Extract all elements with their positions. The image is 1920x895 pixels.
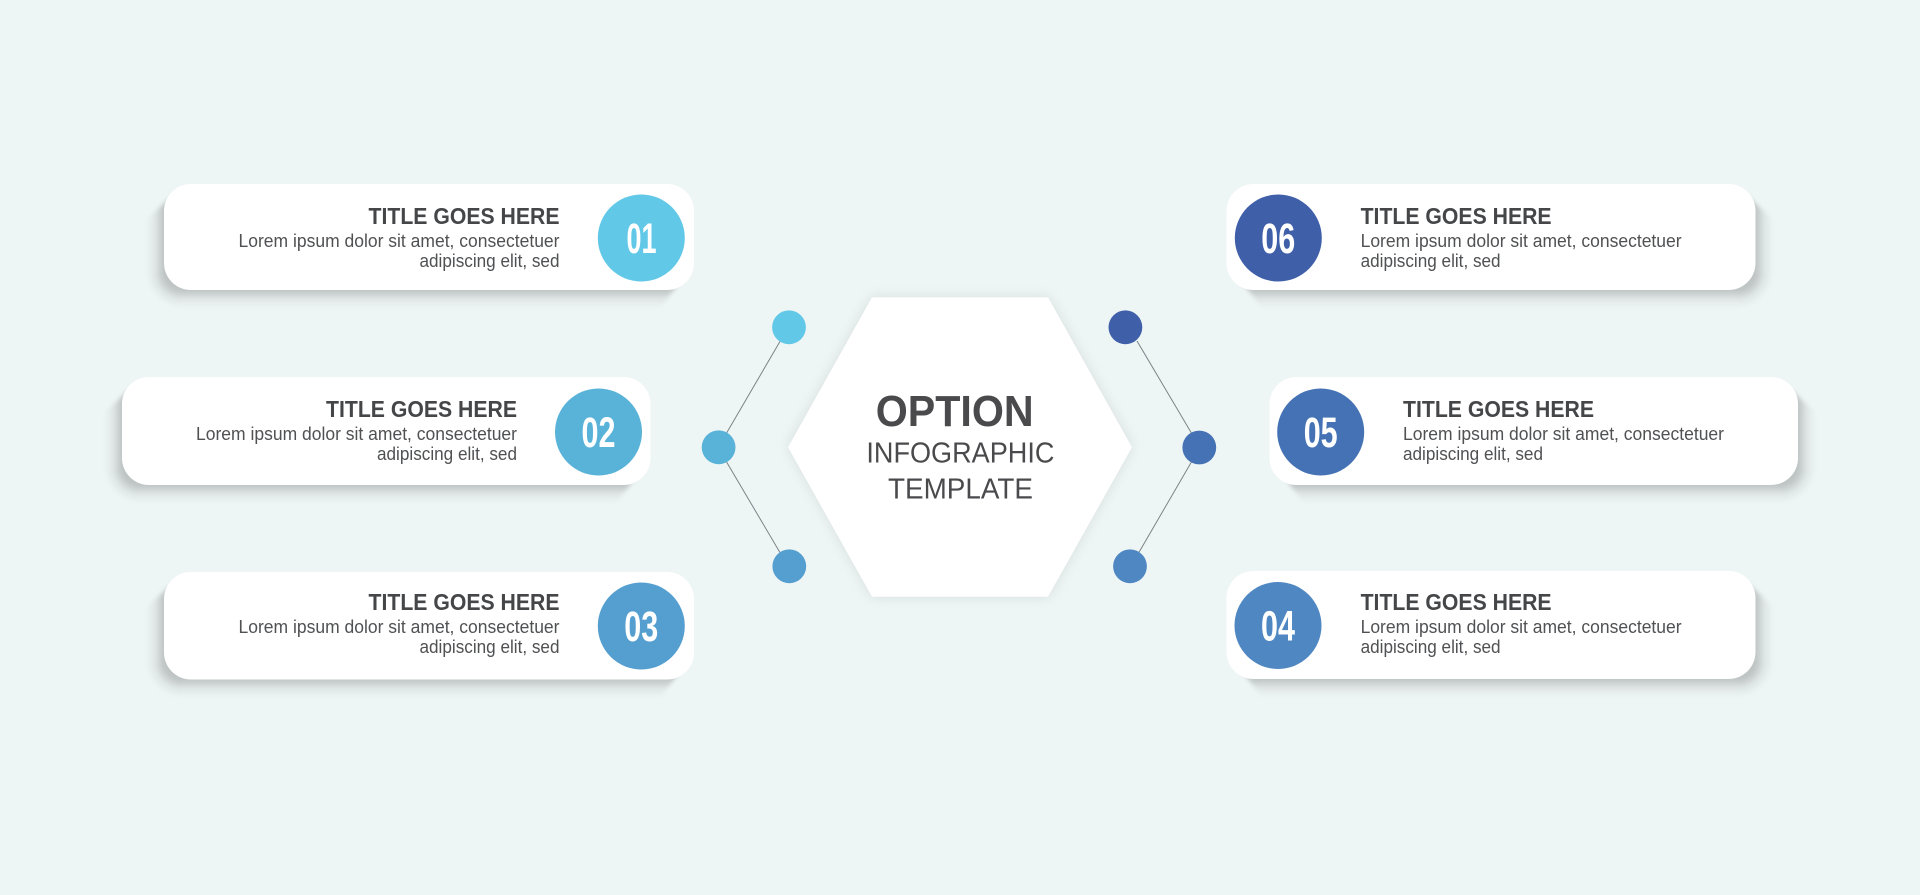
center hexagon <box>788 297 1132 597</box>
title 02: TITLE GOES HERE <box>326 396 517 422</box>
text 06: Lorem ipsum dolor sit amet, consectetuer <box>1361 231 1682 251</box>
text 01: Lorem ipsum dolor sit amet, consectetuer <box>238 231 560 251</box>
number badge 03: 03 <box>624 603 658 651</box>
panel: card 05 <box>1270 377 1816 503</box>
text 03 <box>238 617 560 657</box>
text 01: adipiscing elit, sed <box>420 251 560 271</box>
panel: card 02 <box>104 377 650 503</box>
title 01: TITLE GOES HERE <box>368 203 560 229</box>
text 05 <box>1403 424 1724 464</box>
title 04: TITLE GOES HERE <box>1361 589 1552 615</box>
panel: card 04 <box>1226 571 1774 697</box>
text 01 <box>238 231 560 271</box>
number badge 04: 04 <box>1261 602 1295 650</box>
title 05: TITLE GOES HERE <box>1403 396 1594 422</box>
text 05: Lorem ipsum dolor sit amet, consectetuer <box>1403 424 1724 444</box>
number badge 05 <box>1277 388 1364 476</box>
text 02: Lorem ipsum dolor sit amet, consectetuer <box>196 424 517 444</box>
number badge 01 <box>598 194 685 282</box>
center heading: OPTION <box>876 388 1034 436</box>
text 04: Lorem ipsum dolor sit amet, consectetuer <box>1361 617 1682 637</box>
number badge 04 <box>1234 582 1322 669</box>
text 06 <box>1361 231 1682 271</box>
center subheading: INFOGRAPHIC <box>866 437 1054 469</box>
panel: card 06 <box>1226 184 1774 308</box>
number badge 02: 02 <box>582 409 616 457</box>
number badge 01: 01 <box>626 215 656 263</box>
connector: left nodes <box>702 310 806 583</box>
text 06: adipiscing elit, sed <box>1361 251 1501 271</box>
number badge 05: 05 <box>1304 409 1338 457</box>
number badge 06: 06 <box>1261 215 1295 263</box>
number badge 03 <box>598 582 685 670</box>
panel: card 03 <box>146 572 694 698</box>
title 03: TITLE GOES HERE <box>368 589 560 615</box>
text 03: Lorem ipsum dolor sit amet, consectetuer <box>238 617 560 637</box>
center subheading <box>866 437 1054 506</box>
text 02: adipiscing elit, sed <box>377 444 517 464</box>
number badge 02 <box>555 388 642 476</box>
text 04 <box>1361 617 1682 657</box>
panel: card 01 <box>146 184 694 308</box>
text 05: adipiscing elit, sed <box>1403 444 1543 464</box>
title 06: TITLE GOES HERE <box>1361 203 1552 229</box>
center subheading: TEMPLATE <box>888 474 1033 506</box>
text 03: adipiscing elit, sed <box>420 637 560 657</box>
text 04: adipiscing elit, sed <box>1361 637 1501 657</box>
text 02 <box>196 424 517 464</box>
connector: right nodes <box>1108 310 1216 583</box>
number badge 06 <box>1235 194 1322 282</box>
